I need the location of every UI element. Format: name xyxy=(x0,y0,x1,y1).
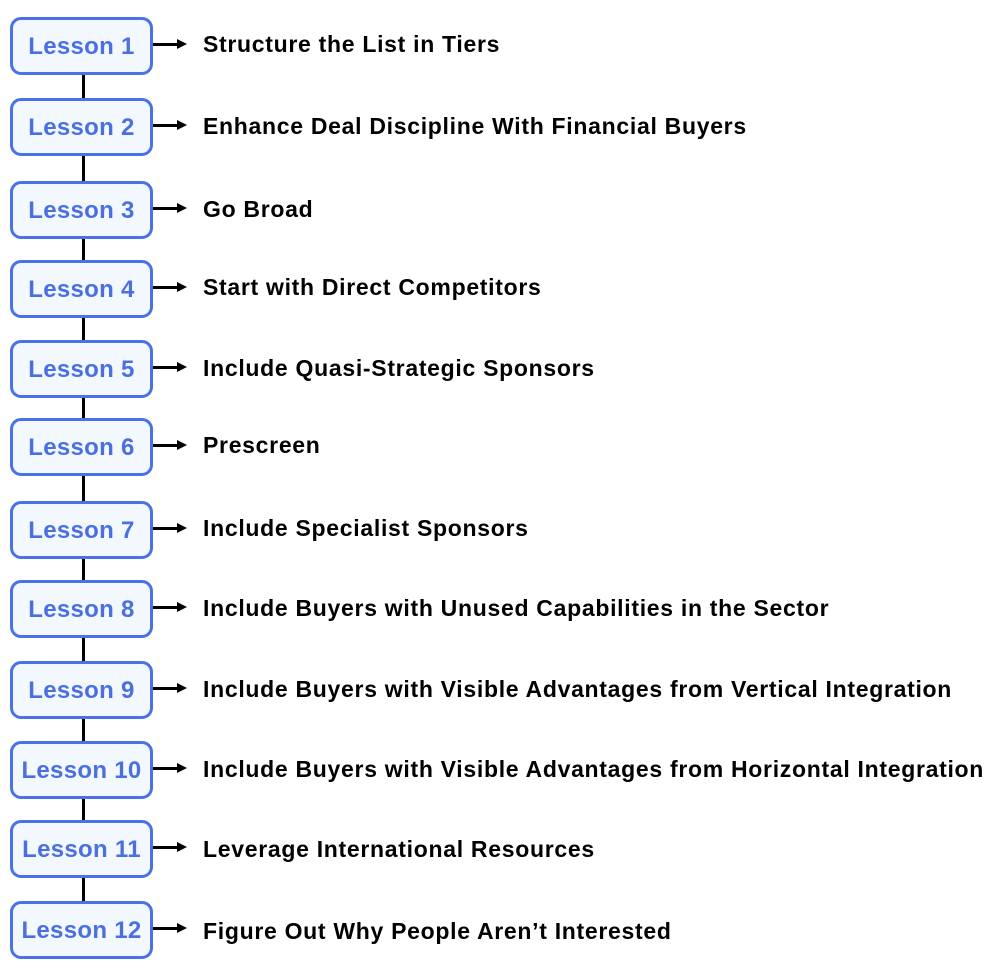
lesson 9: Lesson 9 xyxy=(28,677,135,704)
lesson 2: Enhance Deal Discipline With Financial Buyers xyxy=(203,113,747,139)
lesson 1: Lesson 1 xyxy=(28,33,135,60)
lesson 4: Lesson 4 xyxy=(28,276,135,303)
lesson 7: Lesson 7 xyxy=(28,517,135,544)
lesson 12: Figure Out Why People Aren’t Interested xyxy=(203,918,672,944)
lesson 1: Structure the List in Tiers xyxy=(203,31,500,57)
lesson 9 xyxy=(10,661,952,719)
lesson 5: Include Quasi-Strategic Sponsors xyxy=(203,355,595,381)
lesson 3: Go Broad xyxy=(203,196,313,222)
lesson 3 xyxy=(10,181,313,239)
lesson 8: Lesson 8 xyxy=(28,596,135,623)
lesson 6: Lesson 6 xyxy=(28,434,135,461)
lesson 11 xyxy=(10,820,595,878)
lesson 7 xyxy=(10,501,529,559)
lesson 10: Include Buyers with Visible Advantages from Horizontal Integration xyxy=(203,756,984,782)
lesson 11: Lesson 11 xyxy=(22,836,141,863)
lesson 8: Include Buyers with Unused Capabilities in the Sector xyxy=(203,595,829,621)
lesson 3: Lesson 3 xyxy=(28,197,135,224)
lesson 2 xyxy=(10,98,747,156)
lesson 12 xyxy=(10,901,672,959)
lesson 9: Include Buyers with Visible Advantages from Vertical Integration xyxy=(203,676,952,702)
lesson 4: Start with Direct Competitors xyxy=(203,274,542,300)
lesson 6: Prescreen xyxy=(203,432,321,458)
lesson 4 xyxy=(10,260,542,318)
lesson 11: Leverage International Resources xyxy=(203,836,595,862)
lesson 6 xyxy=(10,418,321,476)
lesson 1 xyxy=(10,17,500,75)
lesson 10: Lesson 10 xyxy=(21,757,142,784)
lesson 5: Lesson 5 xyxy=(28,356,135,383)
lesson 2: Lesson 2 xyxy=(28,114,135,141)
lesson 5 xyxy=(10,340,595,398)
lesson 7: Include Specialist Sponsors xyxy=(203,515,529,541)
lesson 8 xyxy=(10,580,829,638)
lesson 10 xyxy=(10,741,984,799)
lesson 12: Lesson 12 xyxy=(21,917,142,944)
